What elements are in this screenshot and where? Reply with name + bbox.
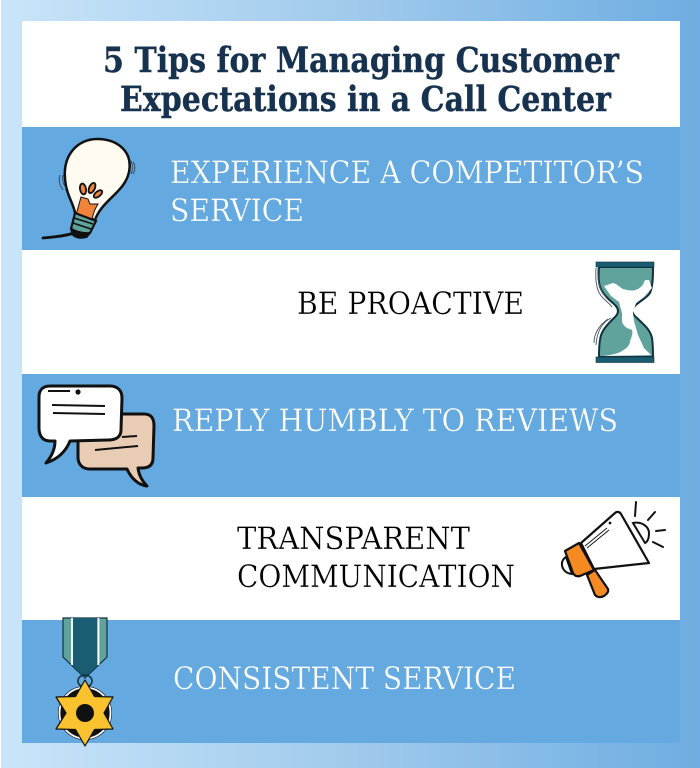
tip 5 text: CONSISTENT SERVICE [173, 661, 516, 697]
icon: megaphone [562, 502, 665, 597]
title: Expectations in a Call Center [120, 79, 611, 120]
tip 3 text: REPLY HUMBLY TO REVIEWS [172, 403, 618, 439]
panel: tip 4 band [22, 497, 680, 620]
tip 1 text [170, 155, 644, 229]
icon: speech bubbles [39, 386, 154, 486]
tip 4 text: TRANSPARENT [237, 521, 470, 557]
icon: light bulb [43, 139, 135, 238]
panel: tip 2 band [22, 250, 680, 374]
panel: tip 1 band [22, 127, 680, 250]
tip 4 text [237, 521, 515, 595]
panel: title [22, 21, 680, 127]
tip 1 text: SERVICE [170, 193, 304, 229]
panel: tip 3 band [22, 374, 680, 497]
title: 5 Tips for Managing Customer [103, 40, 619, 81]
tip 4 text: COMMUNICATION [237, 559, 515, 595]
tip 2 text: BE PROACTIVE [297, 286, 524, 322]
tip 1 text: EXPERIENCE A COMPETITOR’S [170, 155, 644, 191]
icon: medal [56, 618, 113, 746]
icon: hourglass [594, 262, 654, 362]
panel: tip 5 band [22, 620, 680, 743]
title [103, 40, 619, 120]
